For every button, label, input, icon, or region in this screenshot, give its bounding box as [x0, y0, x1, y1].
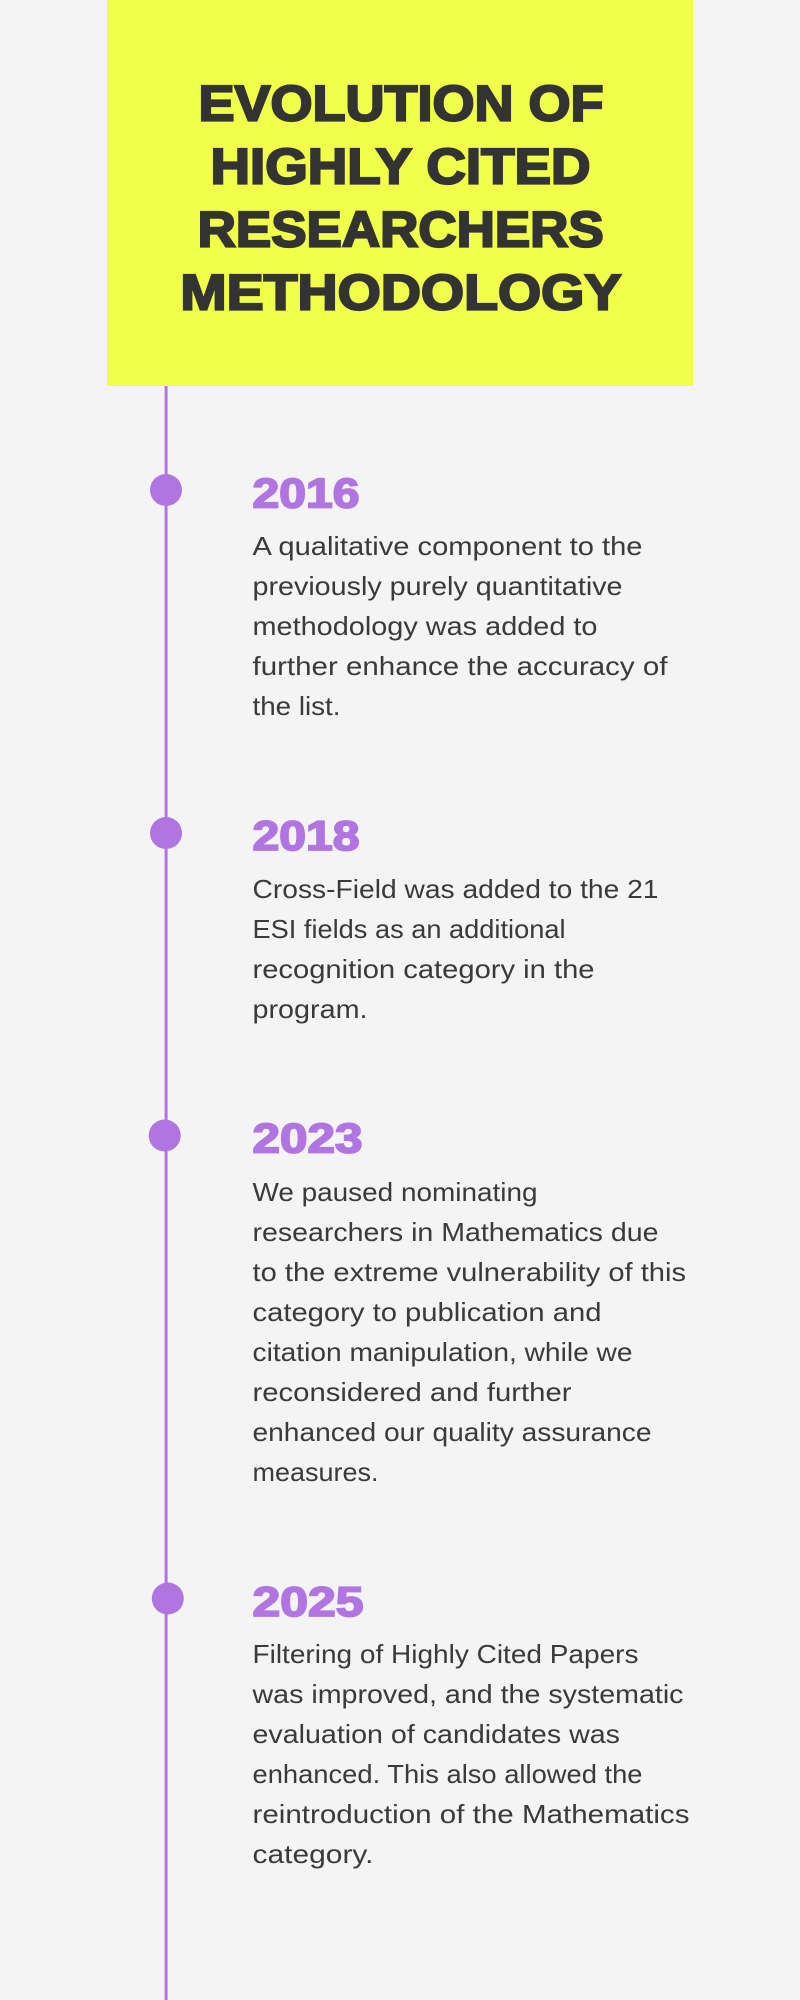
header panel [107, 0, 693, 386]
year 2018: 2018 [252, 812, 360, 859]
year 2023: 2023 [252, 1114, 362, 1162]
title: EVOLUTION OF [198, 74, 604, 132]
description 2016: further enhance the accuracy of [252, 651, 668, 681]
marker dot 2018 [150, 817, 182, 849]
description 2023: measures. [252, 1457, 378, 1487]
description 2023 [252, 1177, 686, 1487]
description 2018: program. [252, 994, 368, 1024]
title [180, 74, 621, 320]
description 2025: Filtering of Highly Cited Papers [252, 1639, 638, 1669]
description 2023: reconsidered and further [252, 1377, 572, 1407]
description 2025: evaluation of candidates was [252, 1719, 620, 1749]
title: HIGHLY CITED [210, 138, 590, 194]
description 2025: enhanced. This also allowed the [252, 1759, 642, 1789]
timeline entry: 2018 [150, 812, 658, 1024]
description 2023: to the extreme vulnerability of this [252, 1257, 686, 1287]
title: METHODOLOGY [180, 264, 621, 320]
year 2016: 2016 [252, 470, 360, 516]
description 2023: enhanced our quality assurance [252, 1417, 652, 1447]
description 2018: Cross-Field was added to the 21 [252, 874, 658, 904]
description 2016 [252, 531, 668, 721]
timeline entry: 2016 [150, 470, 668, 721]
description 2023: We paused nominating [252, 1177, 538, 1207]
marker dot 2023 [149, 1120, 181, 1152]
year 2025: 2025 [252, 1578, 364, 1625]
marker dot 2025 [152, 1582, 184, 1614]
description 2018: recognition category in the [252, 954, 594, 984]
description 2018: ESI fields as an additional [252, 914, 566, 944]
description 2016: previously purely quantitative [252, 571, 622, 601]
description 2025: was improved, and the systematic [251, 1679, 683, 1709]
timeline entry: 2025 [152, 1578, 690, 1869]
timeline vertical line [165, 386, 168, 2000]
description 2023: citation manipulation, while we [252, 1337, 632, 1367]
description 2025: reintroduction of the Mathematics [252, 1799, 690, 1829]
description 2016: methodology was added to [252, 611, 598, 641]
description 2023: category to publication and [252, 1297, 602, 1327]
description 2016: A qualitative component to the [252, 531, 642, 561]
description 2025: category. [252, 1839, 374, 1869]
description 2025 [251, 1639, 689, 1869]
description 2018 [252, 874, 658, 1024]
description 2023: researchers in Mathematics due [252, 1217, 658, 1247]
title: RESEARCHERS [198, 200, 604, 258]
timeline entry: 2023 [149, 1114, 686, 1487]
marker dot 2016 [150, 474, 182, 506]
description 2016: the list. [252, 691, 340, 721]
